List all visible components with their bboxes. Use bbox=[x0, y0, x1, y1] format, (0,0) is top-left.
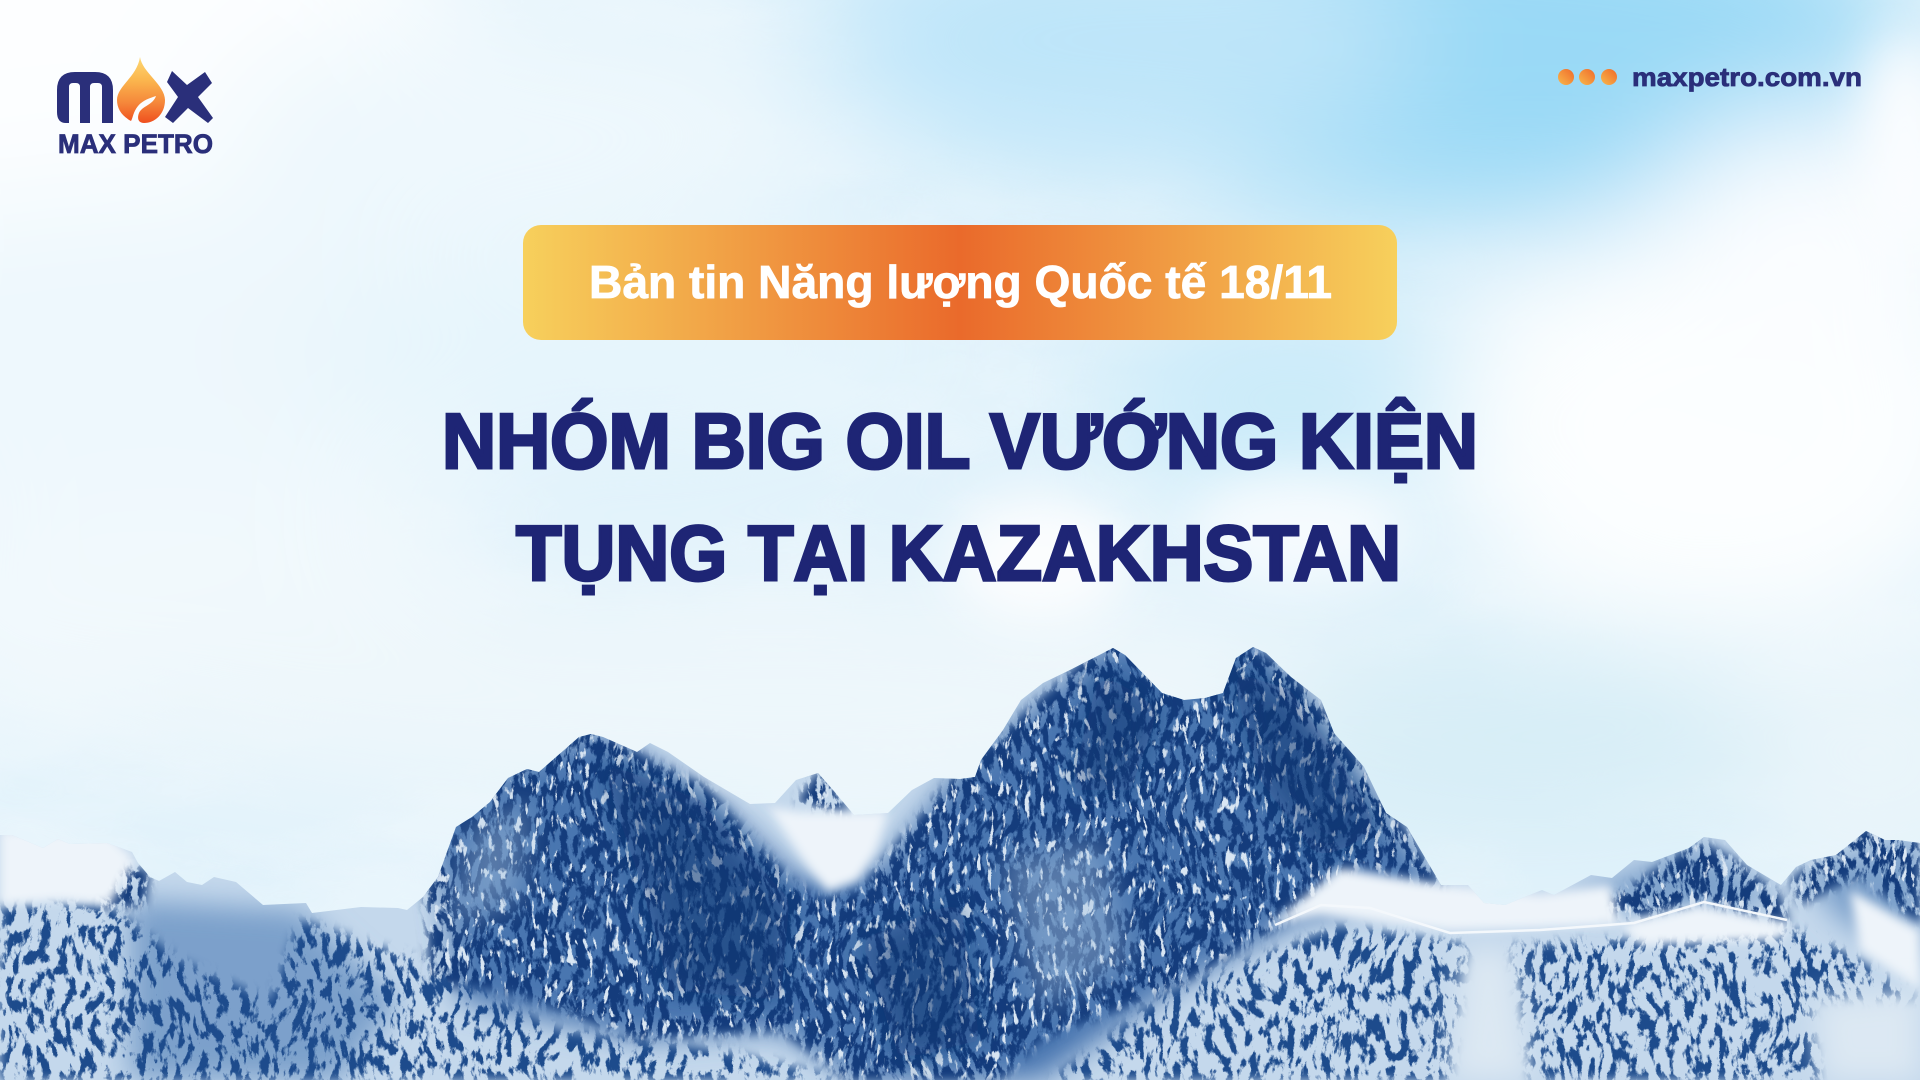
snow flecks on the rock bbox=[0, 640, 1920, 1080]
snow base of the range bbox=[0, 640, 1920, 1080]
mountain range bbox=[0, 640, 1920, 1080]
lighter snow-washed faces bbox=[450, 800, 1130, 1010]
logo letter X bbox=[165, 71, 213, 123]
title line 2: TỤNG TẠI KAZAKHSTAN bbox=[516, 509, 1401, 597]
banner background bbox=[523, 225, 1397, 340]
banner text: Bản tin Năng lượng Quốc tế 18/11 bbox=[589, 256, 1332, 308]
website address: maxpetro.com.vn bbox=[1632, 62, 1862, 92]
bright glacier and snow fields bbox=[0, 745, 1920, 990]
title line 1: NHÓM BIG OIL VƯỚNG KIỆN bbox=[442, 397, 1478, 485]
website link bbox=[1558, 62, 1862, 92]
logo: Max Petro bbox=[57, 57, 213, 159]
snowy foreground ridge line bbox=[1275, 902, 1787, 933]
mid-blue shaded slopes bbox=[430, 640, 1440, 1080]
main title bbox=[442, 397, 1478, 597]
dark rock texture on the main massifs bbox=[0, 640, 1920, 1080]
three orange dots bbox=[1558, 69, 1617, 85]
logo letter m bbox=[57, 72, 113, 123]
logo wordmark: MAX PETRO bbox=[58, 129, 213, 159]
icon: flame bbox=[117, 57, 165, 123]
speckled rock over lower snow slopes bbox=[0, 900, 1918, 1080]
deep shadow faces bbox=[600, 670, 1380, 1060]
front snow patches bbox=[1450, 950, 1920, 1080]
banner: bulletin heading bbox=[523, 225, 1397, 340]
